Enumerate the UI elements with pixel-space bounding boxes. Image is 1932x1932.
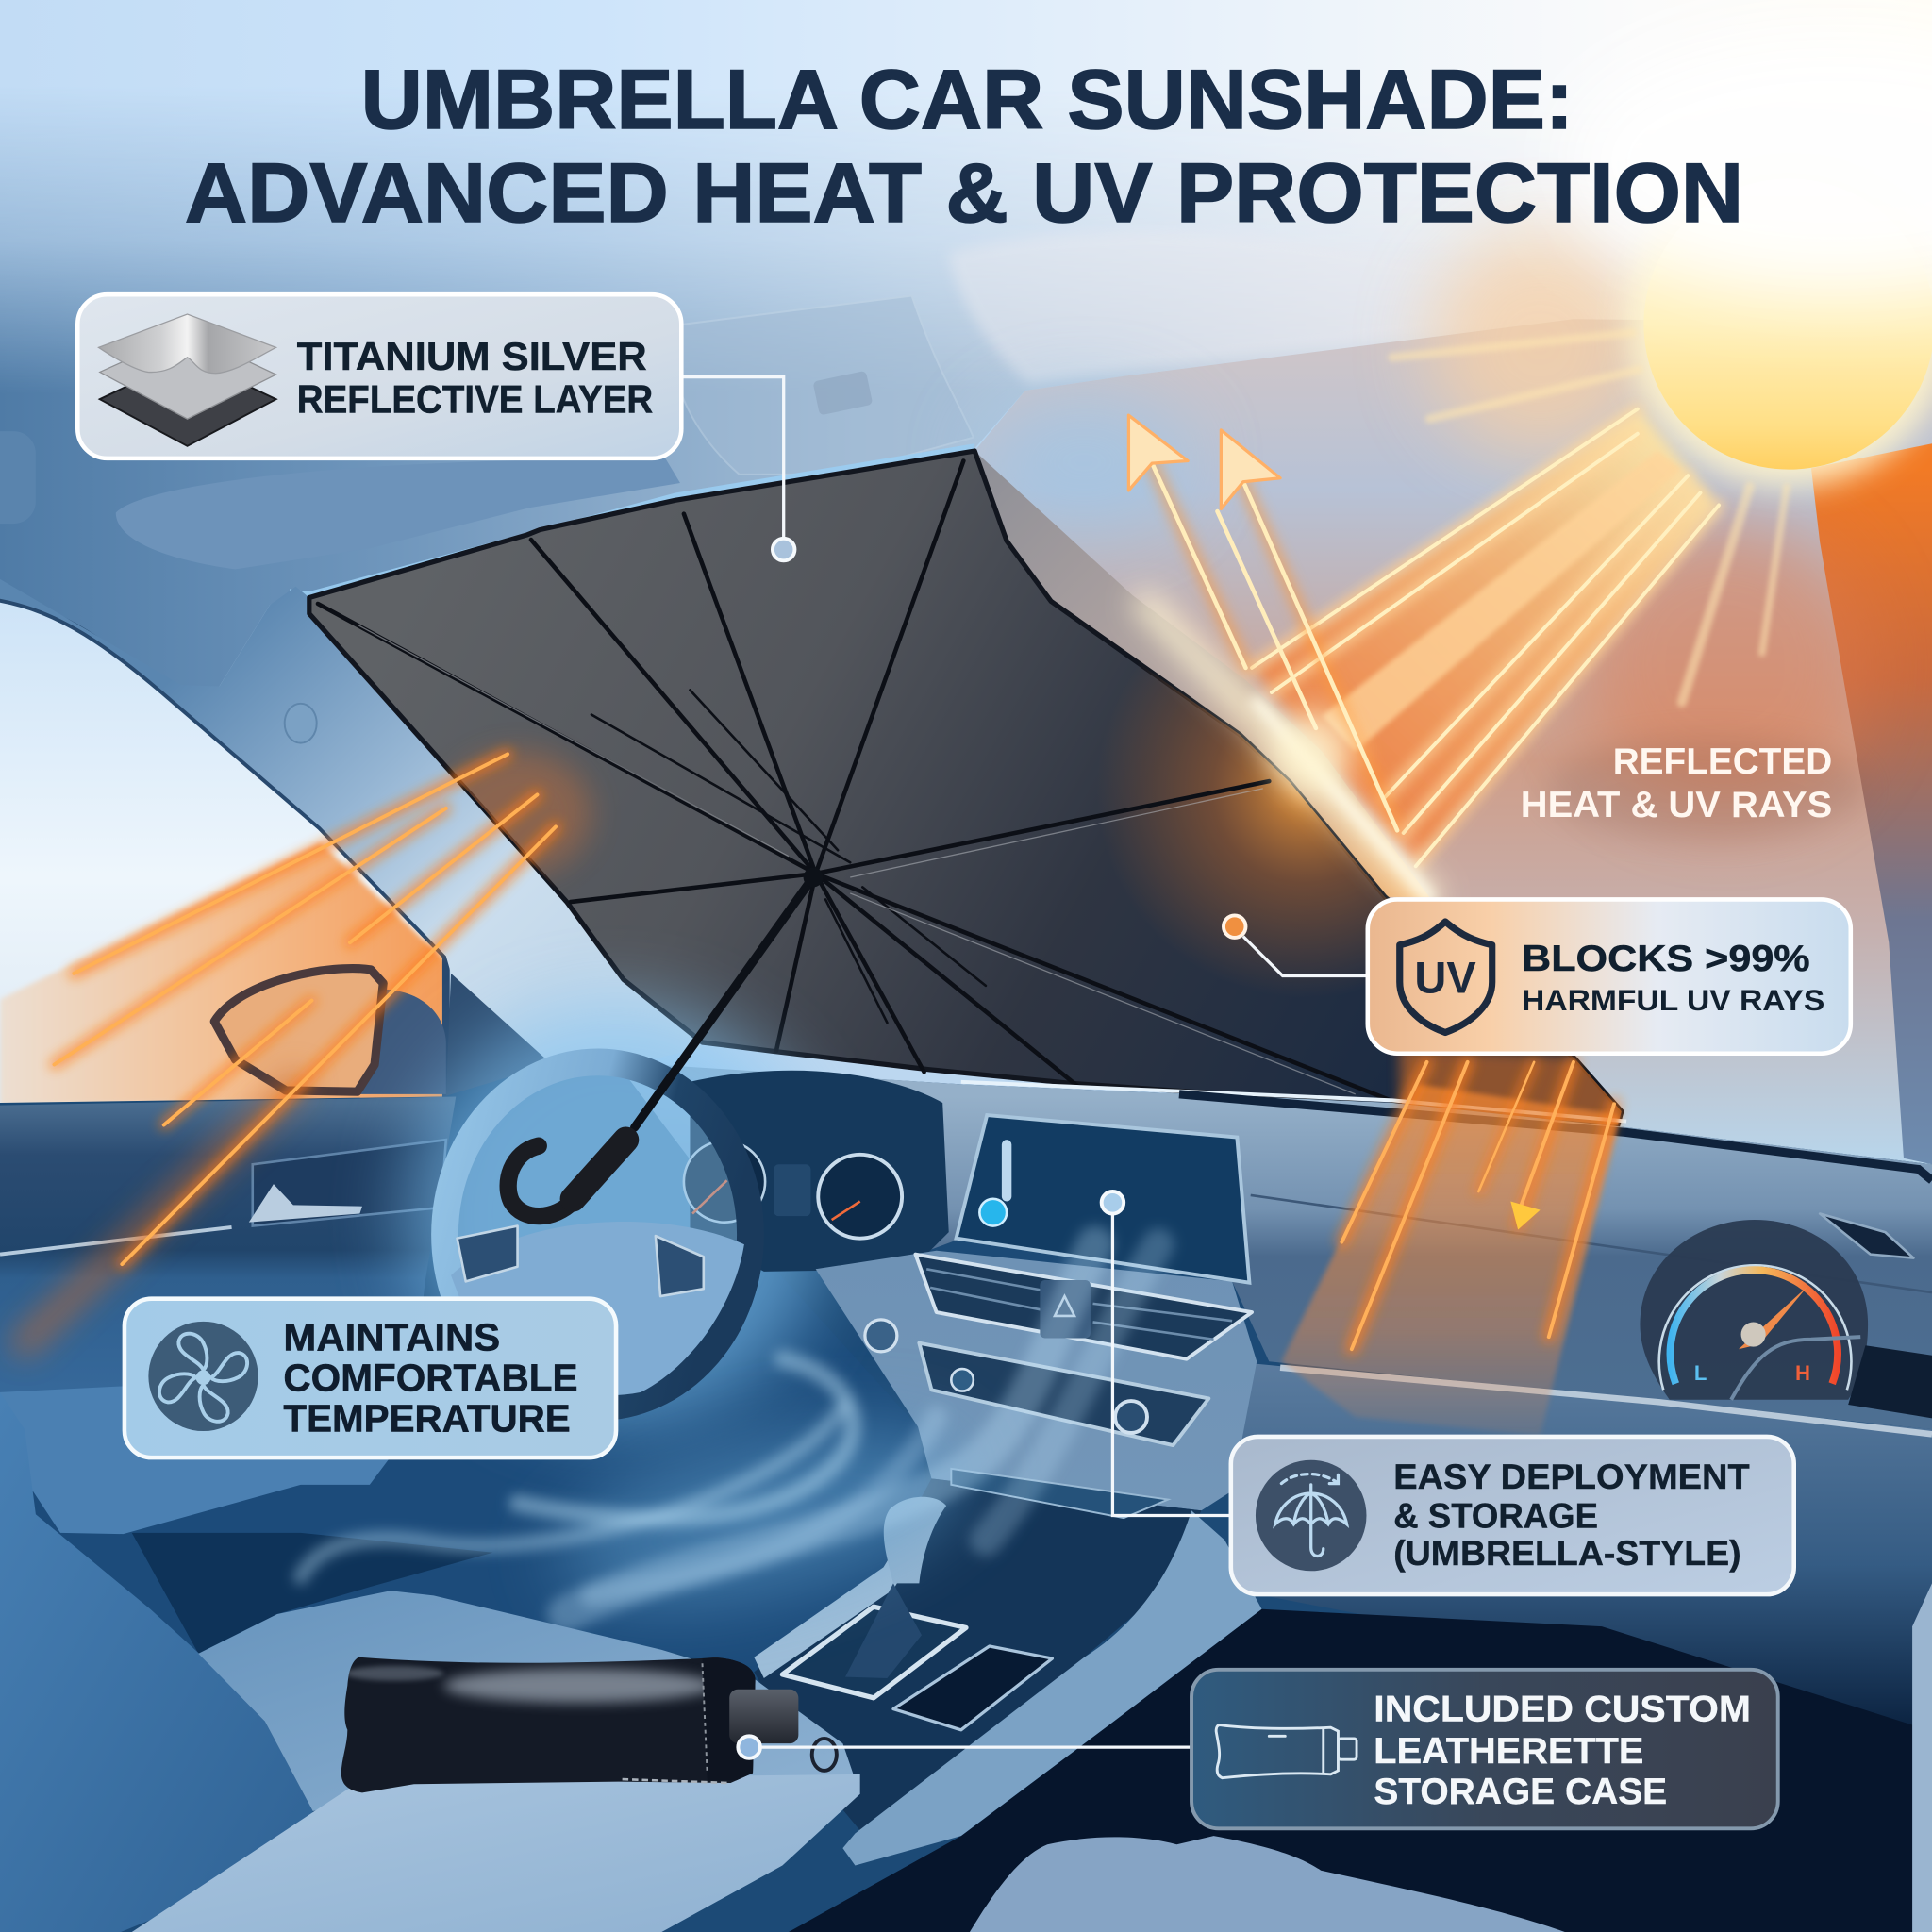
callout: comfortable temperature: MAINTAINS	[283, 1316, 500, 1359]
interior base	[0, 1059, 1932, 1932]
canopy fold sliver	[974, 451, 1429, 897]
reflected rays label: REFLECTED	[1613, 741, 1832, 782]
roof headliner	[0, 0, 1932, 691]
callout: easy deployment: & STORAGE	[1393, 1496, 1598, 1536]
icon: case outline	[1216, 1725, 1357, 1778]
callout: included storage case: LEATHERETTE	[1374, 1731, 1643, 1772]
gear selector	[782, 1497, 966, 1698]
armrest	[132, 1774, 860, 1932]
callout: easy deployment: (UMBRELLA-STYLE)	[1393, 1533, 1741, 1573]
dash trim	[1280, 1368, 1932, 1434]
door arm panel	[0, 1386, 407, 1534]
incoming sun rays	[1252, 409, 1719, 866]
temperature gauge: L	[1694, 1361, 1707, 1385]
windshield sky	[862, 319, 1932, 1164]
side window rubber seal	[0, 599, 446, 1096]
steering wheel	[445, 1062, 750, 1407]
callout: comfortable temperature: COMFORTABLE	[283, 1357, 578, 1400]
left heat rays	[25, 754, 556, 1343]
steering glow	[407, 1004, 825, 1424]
callout: blocks UV: BLOCKS >99%	[1522, 939, 1810, 979]
callout: included storage case: INCLUDED CUSTOM	[1374, 1690, 1751, 1730]
callout: comfortable temperature	[125, 1299, 616, 1457]
sun visor	[116, 458, 680, 569]
driver seat back	[0, 1392, 313, 1932]
side window	[0, 599, 446, 1106]
instrument cluster	[684, 1071, 949, 1272]
blue sky patch	[979, 394, 1189, 530]
case strap	[812, 1739, 837, 1771]
windshield light strip	[290, 443, 974, 611]
air vents right	[1820, 1214, 1932, 1418]
steering column dark area	[0, 1257, 931, 1672]
callout: included storage case: STORAGE CASE	[1374, 1772, 1667, 1812]
transmitted heat rays	[1281, 1062, 1621, 1436]
short sun rays	[1392, 333, 1787, 702]
dark inner pillar	[446, 974, 552, 1096]
start button	[865, 1320, 897, 1352]
right A-pillar	[1811, 443, 1932, 1164]
reflected rays label shadow	[1546, 737, 1867, 841]
connector: UV block	[1224, 915, 1368, 975]
sun	[1643, 178, 1932, 470]
icon: material layers	[98, 314, 276, 446]
seat cushion	[198, 1591, 860, 1811]
console under-stack	[754, 1469, 1201, 1834]
console ridge and side band	[754, 1509, 1261, 1865]
orange light band through side window	[0, 842, 446, 1106]
callout: easy deployment: EASY DEPLOYMENT	[1393, 1457, 1750, 1496]
pillar speaker badge	[285, 704, 317, 743]
title: UMBRELLA CAR SUNSHADE:	[361, 53, 1574, 146]
dark footwell left	[132, 1533, 492, 1654]
reflected rays label	[1521, 741, 1832, 825]
air vents center	[915, 1255, 1252, 1359]
passenger seat	[970, 1583, 1932, 1932]
reflected heat arrows	[1128, 415, 1429, 897]
callout: titanium silver reflective layer: TITANIUM SILVER	[297, 334, 647, 378]
temperature gauge: H	[1795, 1361, 1810, 1385]
grab handle	[0, 431, 36, 524]
umbrella sunshade canopy	[309, 451, 1639, 1140]
temperature gauge	[1640, 1220, 1868, 1400]
icon: UV shield: UV	[1414, 953, 1476, 1003]
icon: umbrella	[1256, 1460, 1366, 1571]
case cap	[729, 1690, 798, 1743]
windshield base line	[961, 1082, 1932, 1180]
connector: storage case	[738, 1736, 1192, 1758]
connector: easy deployment	[1102, 1191, 1232, 1516]
door panel	[0, 1096, 456, 1454]
dash crease line	[1251, 1195, 1932, 1292]
side mirror	[214, 969, 446, 1094]
connector: titanium layer	[680, 377, 794, 560]
canopy ribs	[318, 460, 1400, 1104]
climate panel	[919, 1343, 1208, 1445]
callout: titanium silver reflective layer: REFLECTIVE LAYER	[297, 377, 653, 422]
airflow glow	[542, 1393, 985, 1638]
cool airflow swirls	[301, 1244, 1158, 1614]
leatherette storage case	[341, 1657, 837, 1792]
center stack surround	[816, 1251, 1257, 1510]
overhead console	[665, 231, 1602, 475]
center touchscreen	[957, 1115, 1249, 1283]
callout: titanium silver reflective layer	[77, 294, 681, 458]
sun glow	[1429, 161, 1932, 813]
sun white flare	[1565, 31, 1932, 290]
background sky fading into roof	[0, 0, 1932, 419]
callout: included storage case	[1191, 1670, 1778, 1828]
title	[185, 53, 1743, 240]
callout: easy deployment	[1231, 1437, 1794, 1594]
icon: fan	[148, 1322, 258, 1431]
callout: blocks UV	[1368, 899, 1851, 1054]
callout: blocks UV: HARMFUL UV RAYS	[1522, 984, 1824, 1017]
title: ADVANCED HEAT & UV PROTECTION	[185, 146, 1743, 240]
umbrella shaft and J handle	[508, 868, 823, 1216]
lower dash	[1232, 1361, 1932, 1750]
callout: comfortable temperature: TEMPERATURE	[283, 1397, 571, 1441]
reflected rays label: HEAT & UV RAYS	[1521, 785, 1832, 825]
footwell dark area	[789, 1609, 1932, 1932]
icon: UV shield	[1400, 922, 1492, 1033]
dashboard top	[616, 1062, 1932, 1429]
cup holders	[893, 1646, 1052, 1730]
left A-pillar	[0, 579, 702, 1064]
